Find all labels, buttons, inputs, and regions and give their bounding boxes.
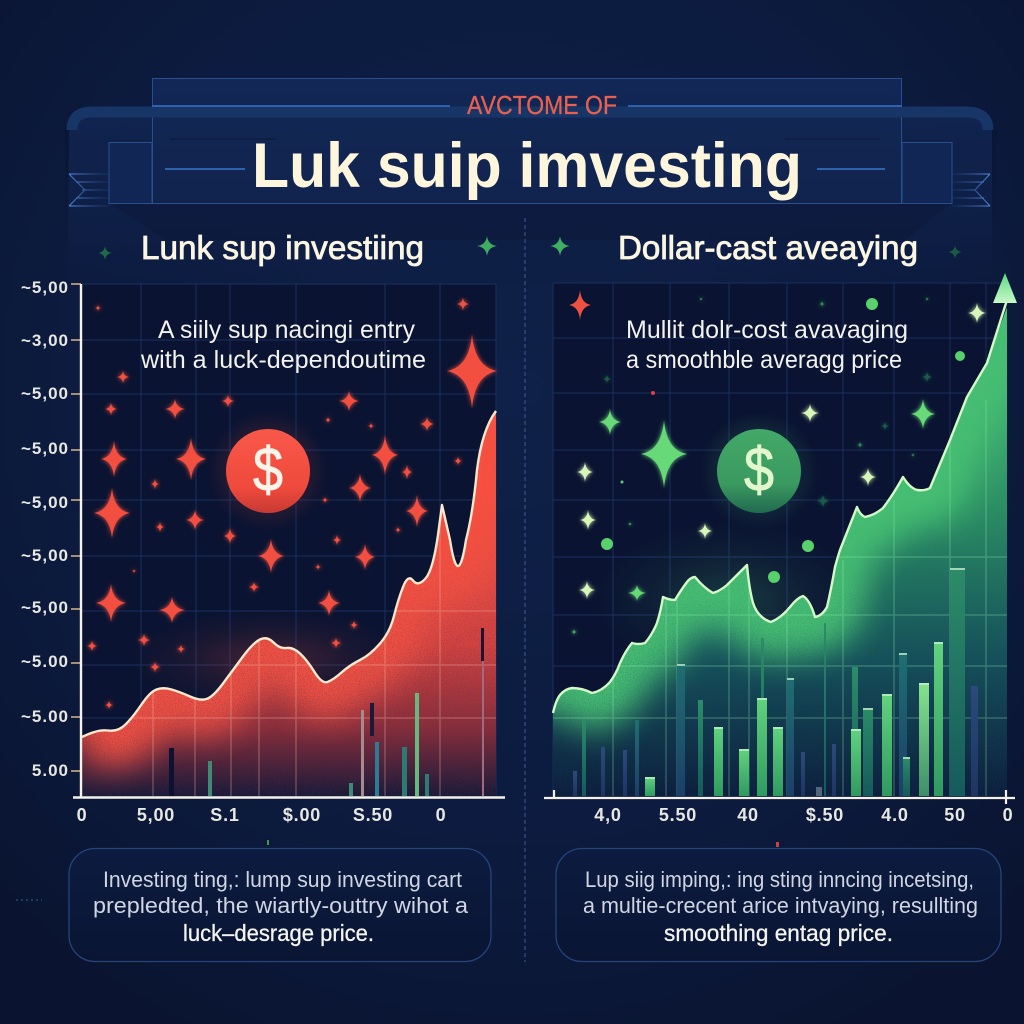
line 1: Lup siig imping,: ing sting inncing incetsing, [585, 867, 974, 892]
green sparkles [571, 297, 935, 654]
title deco lines [170, 138, 880, 140]
x axis labels: 0 [436, 805, 446, 825]
x axis labels: $.50 [806, 805, 844, 825]
coin glow [208, 411, 328, 531]
grid over area [132, 524, 496, 796]
x axis labels: 5,00 [137, 805, 175, 825]
box [69, 848, 491, 962]
y axis labels: ~5,00 [21, 384, 69, 403]
x axis labels: S.50 [353, 805, 393, 825]
curve line [553, 300, 1007, 713]
dollar sign: $ [744, 436, 774, 505]
dollar sign: $ [253, 436, 283, 505]
chart caption: A siily sup nacingi entry [158, 316, 415, 344]
y axis labels: ~3,00 [21, 331, 69, 350]
area grain [553, 500, 1007, 796]
banner main panel [152, 78, 902, 204]
x axis labels: S.1 [210, 805, 240, 825]
line 1: Investing ting,: lump sup investing cart [103, 867, 462, 892]
x axis labels: 4,0 [594, 805, 622, 825]
right heading [550, 229, 962, 266]
line 3: smoothing entag price. [664, 920, 893, 946]
panel: lump sum chart [21, 278, 505, 825]
bars [573, 568, 978, 796]
dim sparkle [98, 246, 112, 260]
line 3: luck–desrage price. [183, 920, 374, 946]
chart caption line 2: a smoothble averagg price [626, 346, 902, 374]
grid [82, 284, 496, 796]
x axis labels: 0 [1003, 805, 1013, 825]
coin glow [699, 411, 819, 531]
plot background [82, 284, 496, 796]
line 2: a multie-crecent arice intvaying, resullting [583, 893, 978, 918]
heading text: Dollar-cast aveaying [618, 229, 918, 266]
coin [226, 429, 310, 513]
arrow head [993, 273, 1017, 303]
frame side edges [67, 126, 994, 240]
grid [553, 283, 1007, 796]
x axis labels [594, 805, 1013, 825]
x axis labels: 5.50 [659, 805, 697, 825]
left heading [98, 229, 497, 266]
panel: dollar-cost chart [544, 273, 1017, 825]
red sparkle [569, 290, 591, 320]
line 2: prepledted, the wiartly-outtry wihot a [93, 893, 469, 918]
coin [717, 429, 801, 513]
title accent lines [165, 168, 885, 170]
axis [544, 790, 1015, 804]
banner frame panel [68, 112, 992, 290]
axes [73, 284, 505, 798]
y axis labels: ~5,00 [21, 546, 69, 565]
pale sparkles [577, 303, 986, 599]
y axis labels: 5.00 [32, 761, 69, 780]
curve-following red glow [82, 411, 496, 737]
eyebrow rule left [152, 105, 450, 107]
center divider [524, 218, 526, 962]
small marks [16, 840, 779, 900]
y axis labels: ~5,00 [21, 598, 69, 617]
banner shadow [109, 203, 952, 240]
main title: Luk suip imvesting [252, 131, 802, 201]
heading text: Lunk sup investiing [141, 229, 424, 266]
red sparkles [87, 298, 497, 709]
ribbon fold left [109, 142, 152, 204]
green area fill [553, 300, 1007, 796]
plot background [553, 283, 1007, 796]
left note box [69, 848, 491, 962]
y axis labels: ~5,00 [21, 278, 69, 297]
y axis labels: ~5,00 [21, 439, 69, 458]
ribbon tail left [69, 174, 109, 206]
area glow [130, 610, 410, 710]
sparkle [550, 236, 570, 256]
x axis labels: 40 [737, 805, 759, 825]
eyebrow rule right [628, 105, 902, 107]
red dot [651, 391, 655, 395]
area glow [590, 520, 870, 680]
red area fill [82, 400, 496, 796]
curve line [82, 411, 496, 737]
right note box [556, 848, 1001, 962]
x axis labels: 4.0 [881, 805, 909, 825]
small bars [169, 628, 484, 796]
bar caps [645, 569, 965, 778]
box [556, 848, 1001, 962]
x axis labels [77, 805, 446, 825]
y axis labels [21, 278, 69, 780]
area grain [82, 500, 496, 796]
y axis labels: ~5.00 [21, 707, 69, 726]
grid over area [553, 400, 1007, 796]
header banner [67, 78, 994, 290]
ribbon tail right [952, 174, 990, 206]
eyebrow text: AVCTOME OF [467, 90, 617, 120]
sparkle [477, 236, 497, 256]
ribbon fold right [902, 142, 952, 204]
chart caption line 2: with a luck-dependoutime [140, 346, 426, 374]
chart caption: Mullit dolr-cost avavaging [626, 316, 908, 344]
y ticks [71, 284, 81, 771]
dim sparkle [948, 245, 962, 259]
y axis labels: ~5,00 [21, 493, 69, 512]
x axis labels: 0 [77, 805, 87, 825]
x axis labels: 50 [944, 805, 966, 825]
curve-following green glow [553, 307, 1007, 713]
x axis labels: $.00 [283, 805, 321, 825]
banner rail [72, 112, 988, 130]
green dots [601, 298, 965, 583]
y axis labels: ~5.00 [21, 652, 69, 671]
